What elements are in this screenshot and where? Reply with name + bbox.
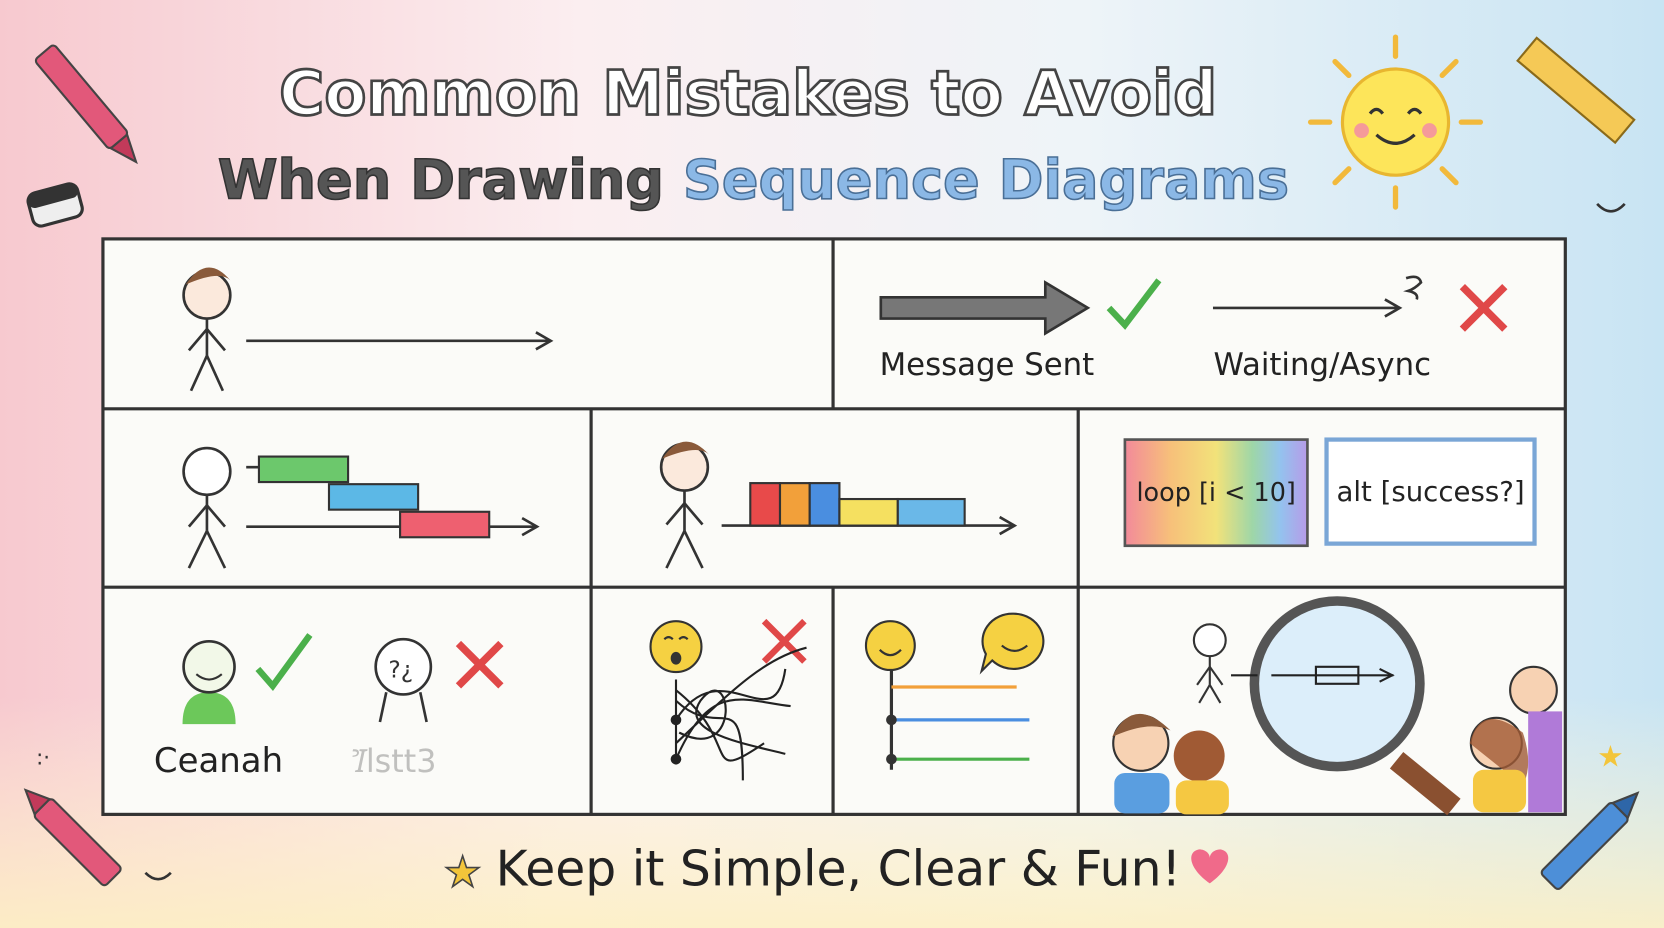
panel: overlapping activation bars [184, 448, 537, 568]
icon: eraser [26, 182, 84, 228]
icon: sun [1311, 37, 1480, 207]
panel: clean parallel arrows [866, 614, 1043, 770]
panel: message sent vs async: Waiting/Async [1214, 347, 1431, 383]
icon: crayon bottom left [17, 781, 122, 887]
title: Common Mistakes to Avoid [279, 58, 1217, 130]
text: ★ [1597, 740, 1624, 775]
panel: loop and alt fragments [1125, 440, 1535, 546]
panel: tangled arrows [651, 621, 807, 780]
panel: loop and alt fragments: loop [i < 10] [1136, 478, 1296, 508]
small decorations [145, 204, 1625, 879]
panel: clear vs unclear naming [154, 635, 501, 781]
icon: crayon bottom right [1540, 784, 1647, 891]
footer slogan: Keep it Simple, Clear & Fun! [496, 841, 1181, 898]
panel: clear vs unclear naming: Ꞽlstt3 [352, 742, 436, 780]
icon: crayon top left [34, 44, 146, 170]
title [218, 58, 1289, 212]
title: When Drawing Sequence Diagrams [218, 149, 1289, 212]
text: :· [36, 745, 50, 770]
panel: message sent vs async [880, 277, 1505, 383]
panel: actor with arrow [184, 267, 551, 391]
panel: clear vs unclear naming: Ceanah [154, 741, 283, 781]
panel: loop and alt fragments: alt [success?] [1336, 475, 1525, 508]
panel: magnifying glass with kids [1112, 601, 1562, 814]
panel: colored activation bars [661, 442, 1015, 568]
panel: message sent vs async: Message Sent [880, 347, 1094, 383]
grid panel [103, 239, 1565, 814]
icon: ruler [1518, 38, 1634, 143]
footer slogan: ★ [444, 849, 482, 898]
panel: clear vs unclear naming: ?¿ [388, 655, 413, 683]
